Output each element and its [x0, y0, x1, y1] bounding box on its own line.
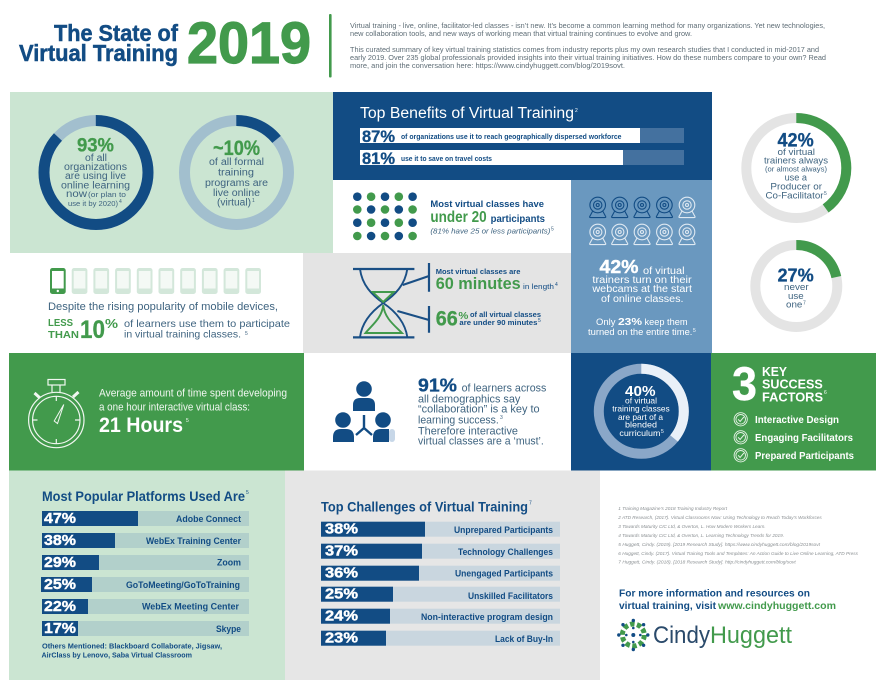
panel: class size — [353, 192, 554, 240]
ring: 93 percent — [44, 120, 148, 224]
bar: Non-interactive program design: 24% — [325, 608, 358, 625]
panel: adoption rings — [10, 92, 333, 253]
class length text: are under 90 minutes — [459, 318, 537, 327]
factor: interactive design — [734, 413, 839, 426]
webcam text: 5 — [693, 328, 696, 334]
ring: 27 percent: 27% — [778, 266, 814, 286]
others mentioned: Others Mentioned: Blackboard Collaborate, Jigsaw, — [42, 642, 222, 651]
development time text: 5 — [186, 418, 189, 424]
bar: Unprepared Participants: 38% — [325, 521, 358, 538]
mobile text: % — [105, 316, 118, 331]
bar: Zoom: Zoom — [217, 558, 241, 568]
footnotes: 2 ATD Research, (2017). Virtual Classrooms Now: Using Technology to Reach Today’s Workforces — [617, 515, 822, 521]
platforms heading: Most Popular Platforms Used Are — [42, 489, 245, 504]
bar: WebEx Training Center: WebEx Training Center — [146, 536, 241, 546]
bar: 87 percent — [360, 127, 684, 146]
webcam text: keep them — [644, 317, 688, 327]
ring: 10 percent: 1 — [252, 198, 255, 204]
collaboration text: Therefore interactive — [418, 425, 518, 437]
panel: blended curriculum — [571, 353, 712, 470]
bar: Skype: Skype — [216, 624, 241, 634]
header — [19, 11, 826, 78]
bar: Skype: 17% — [44, 620, 76, 637]
bar: WebEx Meeting Center — [42, 598, 249, 615]
bar: Unengaged Participants: Unengaged Participants — [455, 568, 553, 578]
ring: 40 percent — [599, 369, 684, 454]
challenges heading: 7 — [529, 500, 532, 506]
call to action: virtual training, visit — [619, 600, 716, 612]
class size text: participants — [491, 214, 545, 225]
year 2019: 2019 — [187, 11, 311, 76]
bar: Unengaged Participants — [321, 565, 560, 582]
key success heading — [732, 357, 827, 410]
panel: mobile devices — [48, 268, 290, 344]
ring: 42 percent: 5 — [824, 191, 827, 197]
bar: Zoom: 29% — [44, 554, 76, 571]
development time text: Average amount of time spent developing — [99, 388, 287, 400]
footnotes: 4 Towards Maturity CIC Ltd, & Overton, L. Learning Technology Trends for 2019. — [618, 533, 784, 539]
ring: 10 percent: live online — [213, 188, 260, 199]
intro text: Virtual training - live, online, facilitator-led classes - isn’t new. It’s become a common learning method for many organizations. Yet new technologies, — [350, 21, 825, 30]
intro text — [350, 21, 826, 70]
bar: Lack of Buy-In — [321, 630, 560, 647]
mobile text: 5 — [245, 331, 248, 337]
bar: Adobe Connect — [42, 510, 249, 527]
development time text: a one hour interactive virtual class: — [99, 402, 250, 414]
ring: 10 percent: programs are — [205, 178, 268, 189]
ring: 42 percent: Producer or — [770, 181, 822, 192]
panel: top challenges — [285, 470, 600, 680]
footnotes: 5 Huggett, Cindy. (2019). [2019 Research Study]. https://www.cindyhuggett.com/blog/2019sovt — [618, 542, 821, 548]
blended text — [612, 384, 670, 438]
blended text: blended — [625, 421, 657, 430]
webcam text: of online classes. — [601, 294, 684, 305]
webcam text: turned on the entire time. — [588, 327, 692, 337]
ring: 42 percent: (or almost always) — [765, 165, 827, 174]
collaboration text: learning success. — [418, 414, 499, 426]
ring: 42 percent: use a — [785, 173, 808, 184]
call to action: For more information and resources on — [619, 588, 810, 600]
panel: top benefits — [333, 92, 712, 180]
title divider — [329, 14, 332, 78]
bar: Unskilled Facilitators — [321, 586, 560, 603]
footnotes: 3 Towards Maturity CIC Ltd, & Overton, L. How Modern Workers Learn. — [618, 524, 766, 530]
webcam text: 42% — [600, 257, 638, 277]
intro text: This curated summary of key virtual training statistics comes from industry reports plus my own research studies that I conducted in mid-2017 and — [350, 45, 819, 54]
bar: 87 percent: 87% — [362, 127, 395, 146]
key success heading: KEY — [762, 364, 787, 379]
title: The State of — [54, 20, 178, 46]
factor: prepared participants: Prepared Participants — [755, 451, 854, 462]
blended text: are part of a — [618, 413, 663, 422]
bar: 87 percent: of organizations use it to reach geographically dispersed workforce — [401, 132, 622, 141]
benefits heading: Top Benefits of Virtual Training — [360, 105, 574, 122]
ring: 93 percent: use it by 2020) — [68, 199, 119, 208]
bar: Non-interactive program design — [321, 608, 560, 625]
footnotes: 7 Huggett, Cindy. (2018). [2018 Research Study]. http://cindyhuggett.com/blog/sovt — [618, 560, 796, 566]
collaboration text: virtual classes are a ‘must’. — [418, 436, 544, 448]
key success heading: SUCCESS — [762, 377, 823, 392]
collaboration text: all demographics say — [418, 394, 521, 406]
class length text: 66 — [436, 308, 458, 331]
logo wordmark: Huggett — [710, 622, 792, 649]
ring: 93 percent: now — [66, 189, 88, 200]
icon: hourglass — [353, 263, 429, 337]
mobile text: LESS — [48, 318, 73, 329]
footnotes — [617, 506, 859, 566]
ring: 27 percent: one — [786, 300, 802, 311]
ring: 93 percent: online learning — [61, 180, 130, 191]
icon: people network — [333, 381, 395, 442]
title — [19, 20, 178, 66]
panel: producer rings — [746, 118, 846, 327]
ring: 10 percent — [184, 120, 288, 224]
class size text: 5 — [551, 226, 554, 232]
bar: 81 percent: 81% — [362, 149, 395, 168]
webcam text: webcams at the start — [591, 284, 692, 295]
bar: Lack of Buy-In: Lack of Buy-In — [495, 634, 553, 644]
blended text: curriculum — [619, 429, 661, 438]
icon: stopwatch — [29, 380, 84, 448]
bar: GoToMeeting — [41, 576, 249, 593]
logo wordmark: Cindy — [653, 622, 710, 649]
bar: Lack of Buy-In: 23% — [325, 630, 358, 647]
ring: 42 percent: of virtual — [778, 147, 815, 158]
ring: 42 percent: 42% — [778, 131, 814, 152]
mobile text: of learners use them to participate — [124, 318, 290, 330]
webcam icons — [590, 197, 695, 245]
others mentioned: AirClass by Lenovo, Saba Virtual Classroom — [42, 651, 192, 660]
panel: webcams — [571, 180, 712, 353]
phone icons — [50, 268, 261, 294]
class length text: of all virtual classes — [470, 310, 541, 319]
intro text: early 2019. Over 235 global professionals provided insights into their virtual training initiatives. How do these numbers compare to your own? Read — [350, 53, 826, 62]
key success heading: 3 — [732, 357, 757, 410]
bar: Adobe Connect: Adobe Connect — [176, 514, 241, 524]
bar: Non-interactive program design: Non-interactive program design — [421, 612, 553, 622]
panel: key success factors — [711, 353, 876, 470]
footnotes: 1 Training Magazine’s 2018 Training Industry Report — [618, 506, 728, 512]
class length text: Most virtual classes are — [436, 267, 520, 276]
ring: 42 percent: Co-Facilitator — [766, 190, 824, 201]
bar: 81 percent — [360, 149, 684, 168]
webcam text: Only — [596, 317, 616, 327]
webcam text — [588, 257, 696, 337]
ring: 10 percent: of all formal — [209, 157, 264, 168]
collaboration text: 91% — [418, 376, 457, 396]
blended text: 40% — [625, 384, 656, 400]
ring: 93 percent: 93% — [77, 136, 114, 156]
ring: 10 percent: ~10% — [213, 137, 260, 160]
ring: 93 percent: of all — [85, 153, 107, 164]
factor: engaging facilitators — [734, 431, 853, 444]
bar: Unskilled Facilitators: 25% — [325, 586, 358, 603]
bar: GoToMeeting: GoToMeeting/GoToTraining — [126, 580, 240, 590]
ring: 93 percent: 4 — [119, 199, 122, 205]
intro text: new collaboration tools, and new ways of working mean that virtual training continues to evolve and grow. — [350, 29, 692, 38]
challenges heading: Top Challenges of Virtual Training — [321, 500, 528, 515]
bar: Technology Challenges — [321, 543, 560, 560]
development time text — [99, 388, 287, 437]
footnotes: 6 Huggett, Cindy. (2017). Virtual Training Tools and Templates: An Action Guide to Live Online Learning, ATD Press — [618, 551, 859, 557]
factor: interactive design: Interactive Design — [755, 415, 839, 426]
bar: 81 percent: use it to save on travel costs — [401, 154, 492, 163]
bar: WebEx Training Center: 38% — [44, 532, 76, 549]
bar: Skype — [42, 620, 249, 637]
key success heading: 6 — [824, 390, 827, 396]
factor: prepared participants — [734, 449, 854, 462]
class length text — [436, 267, 558, 331]
dot grid — [353, 192, 417, 240]
ring: 93 percent: organizations — [64, 162, 127, 173]
icon: logo mark — [617, 619, 650, 651]
webcam text: of virtual — [643, 266, 685, 277]
ring: 42 percent: trainers always — [764, 156, 828, 167]
mobile text: Despite the rising popularity of mobile devices, — [48, 301, 278, 313]
ring: 10 percent: training — [218, 168, 254, 178]
bar: GoToMeeting: 25% — [44, 576, 76, 593]
others mentioned — [42, 642, 222, 660]
class size text: (81% have 25 or less participants) — [430, 226, 551, 235]
bar: WebEx Meeting Center: 22% — [44, 598, 76, 615]
factor: engaging facilitators: Engaging Facilitators — [755, 433, 853, 444]
key success heading: FACTORS — [762, 390, 823, 405]
bar: Technology Challenges: 37% — [325, 543, 358, 560]
bar: WebEx Training Center — [42, 532, 249, 549]
collaboration text: “collaboration” is a key to — [418, 404, 540, 416]
ring: 27 percent: 7 — [803, 300, 806, 306]
call to action — [619, 588, 836, 612]
logo wordmark — [653, 622, 792, 649]
ring: 42 percent — [746, 118, 846, 218]
ring: 93 percent: (or plan to — [88, 190, 126, 199]
collaboration text: 3 — [500, 415, 503, 421]
collaboration text: of learners across — [462, 383, 547, 395]
intro text: more, and join the conversation here: https://www.cindyhuggett.com/blog/2019sovt. — [350, 61, 625, 70]
class length text: % — [458, 311, 469, 322]
class length text: in length — [523, 282, 554, 291]
class size text: Most virtual classes have — [430, 199, 544, 210]
panel: class length — [303, 253, 571, 353]
bar: Unengaged Participants: 36% — [325, 565, 358, 582]
class size text: under 20 — [430, 209, 487, 226]
ring: 93 percent: are using live — [65, 171, 126, 182]
bar: WebEx Meeting Center: WebEx Meeting Center — [142, 602, 239, 612]
bar: Technology Challenges: Technology Challenges — [458, 547, 553, 557]
ring: 27 percent — [755, 245, 837, 327]
ring: 27 percent: use — [788, 291, 804, 302]
webcam text: trainers turn on their — [592, 275, 692, 286]
collaboration text — [418, 376, 547, 448]
development time text: 21 Hours — [99, 414, 183, 437]
blended text: of virtual — [625, 396, 657, 406]
class length text: 4 — [555, 282, 558, 288]
panel: collaboration — [333, 376, 547, 448]
mobile text: 10 — [80, 316, 105, 344]
logo: Cindy Huggett — [617, 619, 792, 651]
bar: Unprepared Participants: Unprepared Participants — [454, 525, 553, 535]
mobile text: in virtual training classes. — [124, 329, 241, 341]
benefits heading: 2 — [575, 108, 578, 114]
blended text: 5 — [661, 429, 664, 435]
blended text: training classes — [612, 405, 670, 414]
class length text: 5 — [538, 318, 541, 324]
panel: popular platforms — [9, 470, 285, 680]
bar: Adobe Connect: 47% — [44, 510, 76, 527]
mobile text: THAN — [48, 330, 79, 341]
ring: 27 percent: never — [784, 282, 809, 293]
call to action: www.cindyhuggett.com — [717, 600, 836, 612]
mobile text — [48, 301, 290, 344]
title: Virtual Training — [19, 40, 178, 66]
ring: 10 percent: (virtual) — [217, 198, 251, 209]
class length text: 60 minutes — [436, 275, 521, 293]
bar: Unprepared Participants — [321, 521, 560, 538]
platforms heading: 5 — [246, 490, 249, 496]
class size text — [430, 199, 554, 235]
webcam text: 23% — [618, 316, 643, 328]
bar: Zoom — [42, 554, 249, 571]
bar: Unskilled Facilitators: Unskilled Facilitators — [468, 591, 553, 601]
panel: development time — [9, 353, 304, 470]
